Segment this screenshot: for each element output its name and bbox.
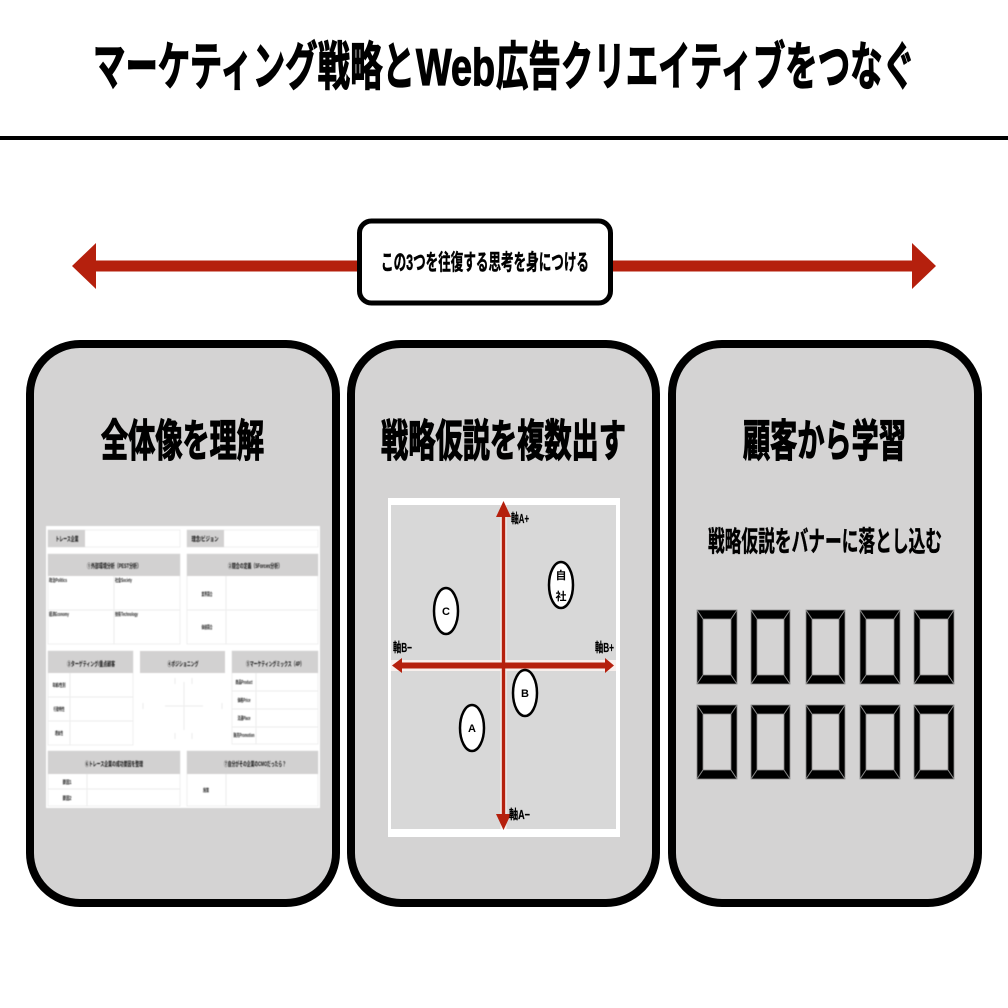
worksheet: [46, 526, 320, 808]
banner 9: [860, 705, 900, 779]
competitor A: A: [468, 723, 476, 735]
worksheet: PEST analysis: ①外部環境分析（PEST分析）: [87, 561, 141, 570]
banner 2: [751, 610, 790, 684]
banner 4: [860, 610, 900, 684]
competitor A: [460, 705, 484, 751]
banner 5: [914, 610, 954, 684]
callout: think across these three: [360, 221, 610, 303]
worksheet: competition definition: [187, 554, 318, 644]
worksheet row: company and vision: トレース企業: [56, 534, 79, 543]
worksheet: targeting: 理由性: [55, 730, 63, 737]
worksheet row: company and vision: [48, 530, 318, 547]
own company: 社: [556, 589, 566, 603]
callout: think across these three: この3つを往復する思考を身につける: [381, 250, 589, 275]
own company: [549, 562, 573, 608]
worksheet: success factors: ⑥トレース企業の成功要因を整理: [85, 759, 143, 768]
worksheet: positioning: ④ポジショニング: [168, 659, 199, 668]
worksheet: if you were the CMO: [187, 751, 318, 806]
worksheet: targeting: 年齢/性別: [52, 682, 66, 689]
heading: learn from customers: 顧客から学習: [743, 417, 906, 466]
banner 6: [697, 705, 737, 779]
banner 7: [751, 705, 790, 779]
worksheet: marketing mix: 流通Place: [238, 715, 251, 722]
panel: strategic hypotheses: [351, 344, 656, 903]
worksheet: competition definition: 価値競合: [202, 624, 212, 631]
heading: overall picture: 全体像を理解: [101, 417, 264, 466]
competitor B: B: [521, 688, 529, 700]
worksheet: if you were the CMO: 施策: [203, 787, 209, 794]
worksheet: targeting: 行動特性: [54, 706, 64, 713]
competitor C: C: [442, 606, 450, 618]
worksheet: targeting: ③ターゲティング/重点顧客: [67, 659, 115, 668]
heading: strategic hypotheses: 戦略仮説を複数出す: [381, 417, 626, 466]
axis B arrow: [392, 658, 614, 673]
axis labels: 軸B+: [595, 640, 614, 655]
worksheet: PEST analysis: [48, 554, 180, 644]
worksheet: PEST analysis: 政治Politics: [49, 577, 67, 584]
worksheet: targeting: [48, 651, 133, 745]
banner 8: [806, 705, 845, 779]
worksheet: marketing mix: ⑤マーケティングミックス（4P）: [246, 659, 304, 668]
worksheet: success factors: 要因2: [62, 795, 72, 802]
worksheet: success factors: 要因1: [62, 779, 72, 786]
banner grid: [697, 610, 954, 779]
title rule: [0, 136, 1008, 140]
competitor B: [513, 670, 537, 716]
worksheet: marketing mix: 商品Product: [236, 679, 253, 686]
title: Web: [416, 39, 495, 97]
worksheet: if you were the CMO: ⑦自分がその企業のCMOだったら？: [224, 759, 286, 768]
worksheet: positioning: [140, 651, 225, 739]
axis A arrow: [496, 501, 511, 830]
axis labels: 軸A−: [509, 807, 530, 822]
worksheet: PEST analysis: 社会Society: [115, 577, 132, 584]
panel: overall picture: [30, 344, 336, 903]
competitor C: [434, 588, 458, 634]
worksheet: PEST analysis: 技術Technology: [115, 611, 138, 618]
axis labels: 軸A+: [511, 511, 529, 526]
axis labels: 軸B−: [393, 640, 412, 655]
worksheet: PEST analysis: 経済Economy: [49, 611, 69, 618]
banner 1: [697, 610, 737, 684]
panel: learn from customers: [672, 344, 978, 903]
worksheet: competition definition: ②競合の定義（5Forces分析）: [228, 561, 282, 570]
worksheet row: company and vision: 理念/ビジョン: [192, 534, 219, 543]
worksheet: competition definition: 業界競合: [202, 591, 212, 598]
positioning map: [388, 498, 620, 837]
banner 3: [806, 610, 845, 684]
title: マーケティング戦略と: [93, 39, 415, 97]
worksheet: marketing mix: 販売Promotion: [234, 732, 254, 739]
double-headed arrow: [72, 243, 936, 289]
axis labels: [393, 511, 614, 822]
worksheet: success factors: [48, 751, 180, 806]
banner 10: [914, 705, 954, 779]
worksheet: marketing mix: [232, 651, 318, 744]
worksheet: marketing mix: 価格Price: [238, 697, 251, 704]
own company: 自: [556, 568, 566, 582]
